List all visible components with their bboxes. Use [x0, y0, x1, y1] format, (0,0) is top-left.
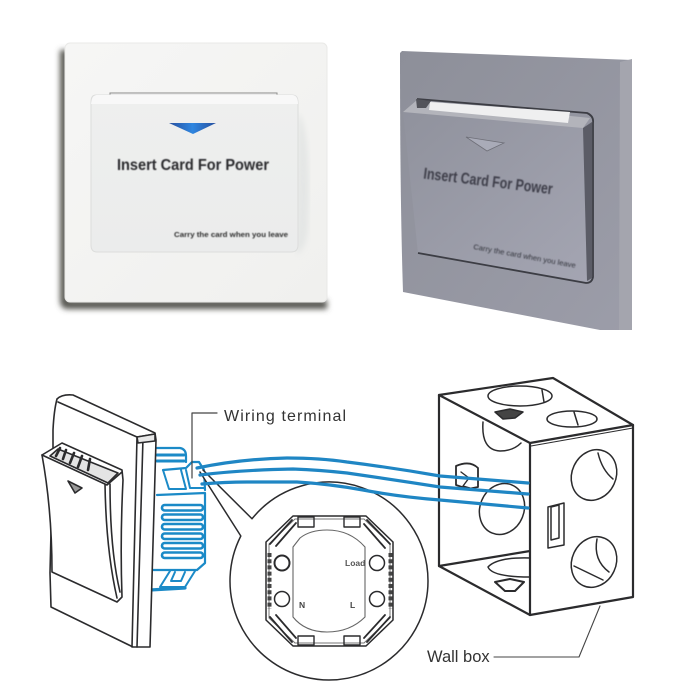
panel: wiring diagram [42, 378, 633, 680]
terminal label Load: Load [345, 558, 365, 568]
grey wall plate [400, 51, 632, 330]
panel: white switch photo [60, 43, 327, 309]
white card slot [110, 93, 277, 98]
card heading: Insert Card For Power [117, 157, 269, 174]
wall box knockouts [456, 386, 625, 595]
diagram: switch module back in blue [150, 448, 205, 590]
panel: grey switch photo [400, 51, 632, 330]
icon: blue LED arrow [169, 123, 216, 134]
icon: grey LED arrow [466, 137, 504, 151]
terminal screws [274, 556, 290, 570]
white key card [91, 95, 309, 254]
terminal inner plate [293, 530, 365, 632]
grey card lip [403, 100, 590, 128]
grey key card [403, 99, 593, 283]
terminal label N: N [299, 600, 305, 610]
white wall plate [65, 43, 327, 302]
icon: card arrow [68, 481, 82, 493]
label: Wiring terminal: Wiring terminal [224, 408, 346, 425]
grey card heading: Insert Card For Power [423, 166, 554, 198]
terminal housing [266, 516, 393, 646]
wall box nuts [495, 409, 523, 419]
diagram: blue wires [197, 458, 528, 508]
diagram: wall box [439, 378, 633, 615]
diagram: switch plate [50, 395, 156, 647]
callout: wall box leader [494, 606, 600, 657]
label: Wall box: Wall box [427, 648, 490, 666]
card note: Carry the card when you leave [174, 232, 288, 239]
wall box slot [548, 503, 564, 548]
white plate shadow [60, 50, 327, 309]
callout: wiring terminal leader [192, 413, 217, 478]
diagram: key card on plate [42, 443, 123, 602]
grey plate side edge [619, 59, 632, 330]
terminal label L: L [350, 600, 355, 610]
grey card note: Carry the card when you leave [473, 244, 576, 270]
grey card outline [417, 99, 593, 283]
callout: terminal magnifier [200, 470, 428, 680]
